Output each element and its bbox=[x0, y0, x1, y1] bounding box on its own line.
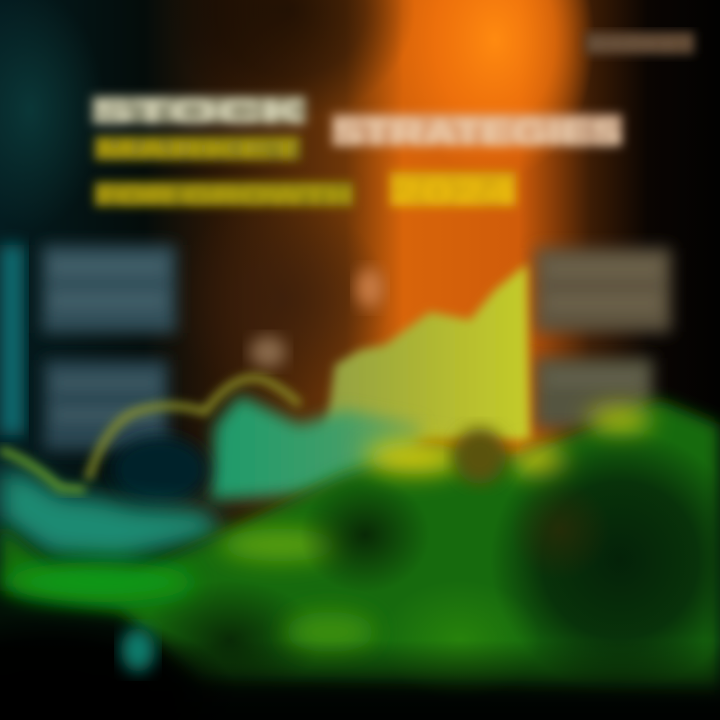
panel: right lower bbox=[535, 358, 653, 428]
heading line 3 bbox=[95, 172, 516, 212]
heading bbox=[92, 93, 622, 212]
heading line 1 bbox=[92, 93, 622, 153]
heading line 1: STRATEGIES bbox=[332, 112, 622, 153]
hills: yellow highlights bbox=[220, 406, 652, 561]
chart marker: upper bbox=[356, 268, 384, 308]
chart marker: lower bbox=[250, 336, 286, 368]
hills: dark foliage bbox=[140, 430, 720, 700]
heading line 2 bbox=[95, 135, 300, 165]
bottom shadow bbox=[0, 610, 720, 720]
hills: bright green bbox=[0, 400, 720, 690]
bottom green glow bbox=[5, 562, 375, 652]
top right label bbox=[586, 32, 694, 57]
panel: left upper bbox=[42, 245, 176, 333]
area chart: lower teal wave bbox=[0, 470, 225, 560]
wave edge: yellow green bbox=[0, 450, 85, 490]
heading line 1: STOCK bbox=[92, 93, 306, 130]
dark gap in chart bbox=[112, 436, 208, 504]
panel: left lower bbox=[44, 360, 168, 450]
area chart: teal bbox=[210, 395, 420, 500]
panel: right upper bbox=[535, 248, 671, 332]
heading line 2: MARKET bbox=[95, 135, 300, 165]
heading line 3: 2024 bbox=[390, 174, 516, 212]
teal drip bbox=[121, 628, 155, 672]
heading line 3: FOR GROWTH bbox=[95, 181, 353, 211]
left edge teal strip bbox=[0, 245, 24, 435]
foliage knot bbox=[454, 428, 506, 484]
top right label: MARKET bbox=[586, 35, 694, 57]
ground base bbox=[0, 500, 720, 720]
area chart: yellow green bbox=[325, 264, 530, 440]
chart line: yellow bbox=[88, 378, 300, 480]
